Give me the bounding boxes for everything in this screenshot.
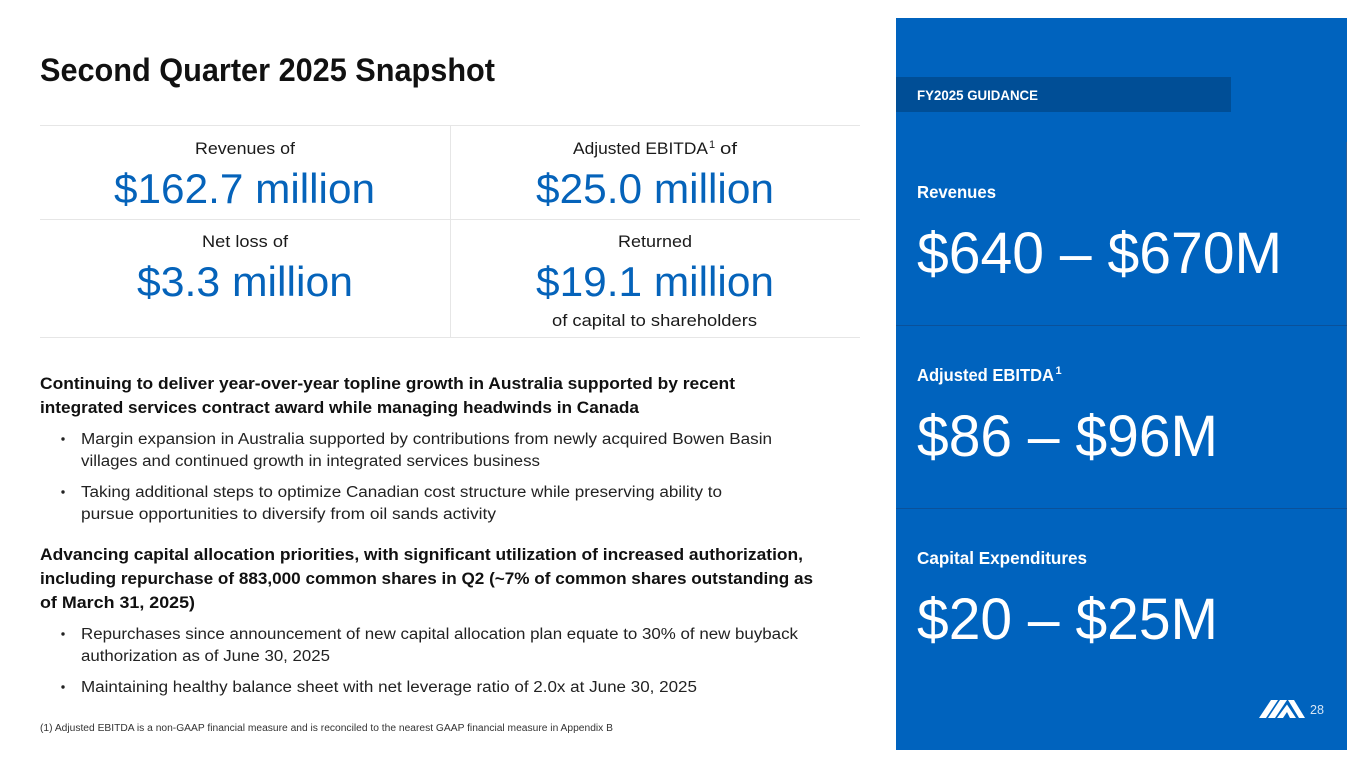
guidance: adjusted EBITDA: Adjusted EBITDA <box>917 365 1054 385</box>
text block: topline growth: integrated services contract award while managing headwinds in Canada <box>40 399 640 417</box>
metric: adjusted EBITDA: 1 <box>709 139 715 151</box>
metric: capital returned <box>536 232 774 330</box>
text block: topline growth: villages and continued growth in integrated services business <box>81 453 540 470</box>
metric: net loss: Net loss of <box>202 232 288 251</box>
metric: capital returned: Returned <box>618 232 692 251</box>
text block: topline growth: Margin expansion in Australia supported by contributions from newly acquired Bowen Basin <box>81 431 772 448</box>
metric: capital returned: $19.1 million <box>536 258 774 305</box>
text block: capital allocation: Maintaining healthy balance sheet with net leverage ratio of 2.0x at June 30, 2025 <box>81 679 697 696</box>
metric: adjusted EBITDA <box>536 139 774 212</box>
panel: key metrics table <box>40 125 860 338</box>
metric: adjusted EBITDA: of <box>720 139 737 158</box>
guidance: revenues <box>917 182 1282 286</box>
guidance: capital expenditures <box>917 548 1218 652</box>
guidance: adjusted EBITDA: $86 – $96M <box>917 404 1218 469</box>
text block: topline growth: Continuing to deliver year-over-year topline growth in Australia supported by recent <box>40 375 736 393</box>
guidance: adjusted EBITDA: 1 <box>1056 365 1062 377</box>
panel: FY2025 guidance <box>896 18 1347 750</box>
guidance heading band <box>896 77 1231 112</box>
metric: net loss <box>137 232 353 305</box>
text block: capital allocation: including repurchase of 883,000 common shares in Q2 (~7% of common shares outstanding as <box>40 570 813 588</box>
footnote: (1) Adjusted EBITDA is a non-GAAP financial measure and is reconciled to the nearest GAAP financial measure in Appendix B <box>40 723 613 734</box>
text block: capital allocation <box>40 546 813 696</box>
title: Second Quarter 2025 Snapshot <box>40 52 495 88</box>
guidance: revenues: $640 – $670M <box>917 221 1282 286</box>
guidance: capital expenditures: Capital Expenditures <box>917 548 1087 568</box>
metric: revenues <box>114 139 375 212</box>
text block: topline growth <box>40 375 772 523</box>
text block: topline growth: pursue opportunities to diversify from oil sands activity <box>81 506 496 523</box>
icon: company logo <box>1259 700 1305 718</box>
guidance: adjusted EBITDA <box>917 365 1218 469</box>
text block: capital allocation: Advancing capital allocation priorities, with significant utilization of increased authorization, <box>40 546 803 564</box>
guidance heading band: FY2025 GUIDANCE <box>917 87 1038 103</box>
text block: capital allocation: of March 31, 2025) <box>40 594 195 612</box>
metric: adjusted EBITDA: Adjusted EBITDA <box>573 139 709 158</box>
text block: capital allocation: Repurchases since announcement of new capital allocation plan equate to 30% of new buyback <box>81 626 798 643</box>
text block: capital allocation: authorization as of June 30, 2025 <box>81 648 330 665</box>
metric: adjusted EBITDA: $25.0 million <box>536 165 774 212</box>
metric: revenues: Revenues of <box>195 139 295 158</box>
page number: 28 <box>1310 702 1324 717</box>
text block: topline growth: Taking additional steps to optimize Canadian cost structure while preserving ability to <box>81 484 722 501</box>
metric: revenues: $162.7 million <box>114 165 375 212</box>
guidance: revenues: Revenues <box>917 182 996 202</box>
metric: net loss: $3.3 million <box>137 258 353 305</box>
metric: capital returned: of capital to shareholders <box>552 311 757 330</box>
guidance: capital expenditures: $20 – $25M <box>917 587 1218 652</box>
